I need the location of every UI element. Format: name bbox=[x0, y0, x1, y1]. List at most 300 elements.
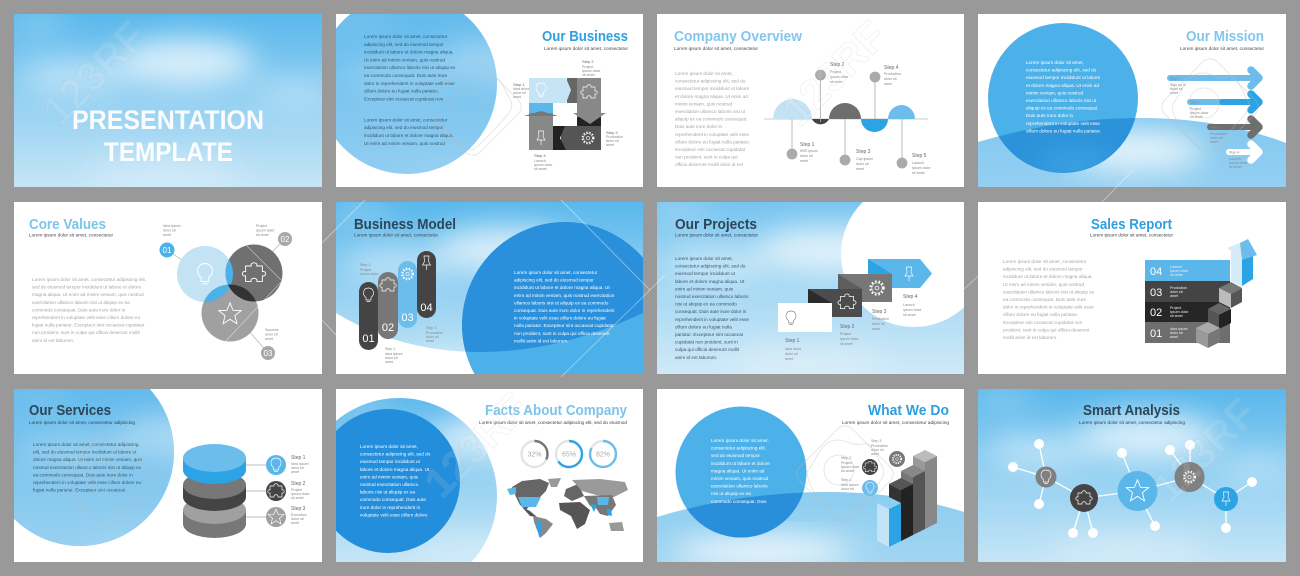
step labels: amet bbox=[785, 357, 793, 361]
pill labels: dolor sit bbox=[385, 356, 398, 360]
pill labels: dolor sit bbox=[426, 335, 439, 339]
numbered pills bbox=[359, 251, 436, 350]
step labels: amet bbox=[606, 143, 614, 147]
step labels bbox=[800, 62, 931, 175]
venn labels: dolor sit bbox=[265, 332, 278, 336]
numbered pills: 03 bbox=[401, 312, 414, 324]
subtitle: Lorem ipsum dolor sit amet, consectetur adipiscing bbox=[842, 420, 949, 425]
body text: pariatur. Excepteur sint occaecat bbox=[675, 332, 744, 337]
body text: Ut enim ad minim veniam, quis nostrud bbox=[1003, 282, 1084, 287]
body text: anim id est laborum. bbox=[32, 338, 74, 343]
step labels: Cap ipsum bbox=[856, 157, 873, 161]
title: Our Projects bbox=[675, 217, 757, 233]
step labels: sit amet bbox=[534, 167, 547, 171]
body text: Lorem ipsum dolor sit amet, consectetur bbox=[364, 117, 448, 122]
body text: sed do eiusmod tempor bbox=[711, 453, 760, 458]
venn labels: amet bbox=[265, 337, 273, 341]
body text: consectetur adipiscing elit, sed do bbox=[1026, 68, 1097, 73]
big blue circle bbox=[462, 222, 668, 428]
wave timeline bbox=[764, 99, 928, 132]
numbered bars: amet bbox=[1170, 335, 1178, 339]
network nodes bbox=[1036, 462, 1238, 512]
venn labels: Idea ipsum bbox=[163, 224, 181, 228]
step labels: Production bbox=[871, 444, 888, 448]
body text: reprehenderit in voluptate velit esse cillum dolore eu bbox=[33, 480, 142, 485]
arrow labels: amet bbox=[1210, 140, 1218, 144]
arrow labels: dolor sit bbox=[1210, 136, 1223, 140]
numbered bars: Launch bbox=[1170, 265, 1182, 269]
body text: Lorem ipsum dolor sit amet, bbox=[675, 71, 733, 76]
body text: magna aliqua. Ut enim ad minim veniam, quis nostrud bbox=[32, 292, 144, 297]
step labels: amet bbox=[291, 521, 299, 525]
slide: Facts About Company bbox=[336, 389, 643, 562]
slide: Sales Report bbox=[978, 202, 1286, 374]
pill labels: Step 2 bbox=[360, 263, 370, 267]
step labels: Idea dolor bbox=[785, 347, 802, 351]
step labels: Step 2 bbox=[841, 456, 851, 460]
body text: officia deserunt mollit anim id est bbox=[675, 162, 744, 167]
step labels: sit amet bbox=[291, 496, 304, 500]
step labels: Idea ipsum bbox=[841, 483, 859, 487]
pill labels bbox=[360, 263, 443, 364]
body text: non proident, sunt in culpa qui officia deserunt mollit bbox=[32, 330, 140, 335]
body text: exercitation ullamco laboris nisi ut aliquip ex bbox=[1003, 289, 1095, 294]
body text: consequat. Duis aute irure dolor in reprehenderit bbox=[514, 308, 615, 313]
title: Our Mission bbox=[1186, 29, 1264, 45]
venn labels: Success bbox=[265, 328, 279, 332]
slide: Business Model bbox=[336, 202, 643, 374]
body text: in voluptate velit esse cillum dolore eu fugiat bbox=[514, 316, 606, 321]
step labels: Launch bbox=[912, 161, 924, 165]
number badges: 01 bbox=[163, 246, 172, 255]
slide: Core Values bbox=[14, 202, 322, 374]
step labels: KBS ipsum bbox=[800, 149, 818, 153]
subtitle: Lorem ipsum dolor sit amet, consectetur bbox=[544, 46, 628, 51]
arrow 3 bbox=[1210, 119, 1259, 135]
numbered bars: 01 bbox=[1150, 328, 1162, 340]
slide: Our Business bbox=[336, 14, 643, 187]
body text: reprehenderit in voluptate velit esse cillum dolore eu bbox=[32, 315, 141, 320]
step labels: sit amet bbox=[912, 171, 925, 175]
pill labels: Production bbox=[426, 331, 443, 335]
step labels: ipsum dolor bbox=[841, 465, 860, 469]
body text: fugiat nulla pariatur. Excepteur sint occaecat bbox=[33, 488, 126, 493]
step labels: Step 1 bbox=[841, 478, 851, 482]
numbered bars: dolor sit bbox=[1170, 331, 1183, 335]
venn labels: sit amet bbox=[256, 233, 269, 237]
donut 82%: 82% bbox=[596, 452, 610, 458]
body text: nostrud exercitation ullamco laboris nisi ut aliquip ex bbox=[33, 465, 142, 470]
pill labels: Step 3 bbox=[426, 326, 436, 330]
body text: nostrud exercitation ullamco laboris bbox=[675, 294, 749, 299]
arrow labels: ipsum dolor bbox=[1229, 161, 1248, 165]
body text: ea commodo consequat. Duis aute irure dolor in bbox=[33, 472, 133, 477]
body text: ullamco laboris nisi ut aliquip ex ea commodo bbox=[514, 300, 609, 305]
step labels: amet bbox=[871, 452, 879, 456]
step labels: Project bbox=[841, 461, 852, 465]
arrow labels: amet bbox=[1170, 91, 1178, 95]
step labels: Step 2 bbox=[291, 481, 306, 487]
body text: exercitation ullamco laboris nisi ut aliquip ex ea bbox=[32, 300, 130, 305]
numbered pills: 02 bbox=[382, 322, 394, 334]
sky circle bbox=[14, 389, 174, 546]
body text: consectetur adipiscing elit, sed do bbox=[675, 79, 746, 84]
step labels: Project bbox=[291, 488, 302, 492]
cover title: PRESENTATION bbox=[72, 105, 264, 135]
arrow labels: Step 2 bbox=[1190, 100, 1200, 104]
numbered bars: Idea ipsum bbox=[1170, 327, 1188, 331]
numbered bars: Production bbox=[1170, 286, 1187, 290]
step labels: amet bbox=[513, 95, 521, 99]
pill labels: amet bbox=[426, 339, 434, 343]
donut 32% bbox=[522, 441, 548, 467]
numbered bars: ipsum dolor bbox=[1170, 310, 1189, 314]
step labels: amet bbox=[884, 82, 892, 86]
body text: Excepteur sint occaecat cupidatat non bbox=[364, 96, 444, 101]
step labels: Step 2 bbox=[840, 324, 855, 330]
pale overlay bbox=[657, 202, 964, 374]
step labels: Project bbox=[830, 70, 841, 74]
body text: reprehenderit in voluptate velit esse bbox=[675, 317, 749, 322]
body text: adipiscing elit, sed do eiusmod tempor bbox=[364, 42, 444, 47]
venn labels bbox=[163, 224, 279, 341]
subtitle: Lorem ipsum dolor sit amet, consectetur bbox=[354, 232, 438, 238]
title: Our Services bbox=[29, 403, 111, 419]
step labels: Step 2 bbox=[830, 62, 845, 68]
body text: dolor in reprehenderit in voluptate velit esse bbox=[364, 81, 455, 86]
subtitle: Lorem ipsum dolor sit amet, consectetur adipiscing bbox=[1079, 420, 1185, 425]
world map bbox=[507, 478, 628, 538]
step labels: dolor sit bbox=[800, 154, 813, 158]
sky background bbox=[973, 387, 1298, 563]
body text: exercitation ullamco laboris nisi ut bbox=[1026, 98, 1097, 103]
arrow labels bbox=[1170, 76, 1248, 169]
body text: enim ad minim veniam, quis bbox=[675, 286, 734, 291]
body text: mollit anim id est laborum. bbox=[514, 338, 568, 343]
body text: enim ad minim veniam, quis nostrud exercitation bbox=[514, 293, 615, 298]
step labels: Step 5 bbox=[912, 153, 927, 159]
body text: magna aliqua. Ut enim ad bbox=[711, 468, 765, 473]
body text: aliquip ex ea commodo consequat. bbox=[675, 117, 747, 122]
numbered bars: 03 bbox=[1150, 287, 1162, 299]
body text: exercitation ullamco laboris nisi ut aliquip ex bbox=[364, 65, 456, 70]
step labels: ipsum dolor bbox=[534, 163, 553, 167]
subtitle: Lorem ipsum dolor sit amet, consectetur adipiscing bbox=[29, 420, 135, 425]
step labels: amet bbox=[800, 159, 808, 163]
sky shape bbox=[336, 202, 643, 352]
slide: Our Projects bbox=[657, 202, 964, 374]
step labels: sit amet bbox=[841, 469, 854, 473]
step labels: amet bbox=[291, 470, 299, 474]
body text: Lorem ipsum dolor sit amet, consectetur bbox=[514, 270, 598, 275]
body text: labore et dolore magna aliqua. Ut bbox=[360, 467, 430, 472]
title: Sales Report bbox=[1091, 217, 1172, 233]
body text: eiusmod tempor incididunt ut labore bbox=[1026, 75, 1101, 80]
body text: non proident, sunt in culpa qui bbox=[675, 155, 738, 160]
step labels: Launch bbox=[534, 159, 546, 163]
arrow labels: Production bbox=[1210, 132, 1227, 136]
body text: enim ad minim veniam, quis bbox=[360, 474, 419, 479]
arrow labels: Project bbox=[1190, 107, 1201, 111]
body text: consectetur adipiscing elit, bbox=[711, 446, 766, 451]
sky circle bbox=[336, 14, 497, 174]
venn diagram bbox=[177, 244, 282, 342]
puzzle diagram bbox=[524, 78, 606, 150]
body text: minim veniam, quis nostrud bbox=[675, 101, 732, 106]
body text: Duis aute irure dolor in bbox=[1026, 113, 1074, 118]
body text: dolor in reprehenderit in voluptate velit esse bbox=[1003, 305, 1094, 310]
body text: elit, sed do eiusmod tempor incididunt ut labore et bbox=[33, 450, 137, 455]
body text: commodo consequat. Duis bbox=[711, 499, 767, 504]
watermark stamps: 123RF bbox=[1143, 389, 1266, 511]
body text: nisi ut aliquip ex ea commodo bbox=[675, 302, 737, 307]
body text: Lorem ipsum dolor sit amet, consectetur adipiscing bbox=[33, 442, 139, 447]
numbered bars: amet bbox=[1170, 294, 1178, 298]
slide: Our Mission bbox=[978, 14, 1286, 187]
body text: culpa qui officia deserunt mollit bbox=[675, 347, 740, 352]
body text: cillum dolore eu fugiat nulla pariatur. bbox=[1026, 128, 1101, 133]
numbered bars: 02 bbox=[1150, 307, 1162, 319]
arrow labels: Step 3 bbox=[1210, 126, 1220, 130]
watermark stamps: 123RF bbox=[33, 12, 156, 134]
step labels: dolor sit bbox=[872, 322, 885, 326]
body text: minim veniam, quis nostrud bbox=[1026, 90, 1083, 95]
step labels: Step 2 bbox=[582, 59, 594, 64]
step labels: Launch bbox=[903, 303, 915, 307]
sky circle bbox=[336, 398, 497, 562]
numbered pills: 01 bbox=[362, 333, 375, 345]
step labels: Step 3 bbox=[606, 130, 618, 135]
step labels: Execution bbox=[291, 513, 307, 517]
cover title bbox=[72, 105, 264, 167]
body text: cillum dolore eu fugiat nulla pariatur. bbox=[364, 89, 439, 94]
step labels: Idea dolor bbox=[513, 87, 530, 91]
pill labels: Project bbox=[360, 268, 371, 272]
numbered pills: 04 bbox=[420, 302, 433, 314]
body text: irure dolor in reprehenderit in bbox=[360, 505, 421, 510]
body text: aliquip ex ea commodo consequat. bbox=[1026, 106, 1098, 111]
arrow labels: dolor sit bbox=[1170, 87, 1183, 91]
step labels: ipsum dolor bbox=[903, 308, 922, 312]
body text: commodo consequat. Duis aute irure dolor in bbox=[32, 307, 126, 312]
step labels: sit amet bbox=[903, 313, 916, 317]
pill labels: ipsum dolor bbox=[360, 272, 379, 276]
subtitle: Lorem ipsum dolor sit amet, consectetur bbox=[1090, 232, 1173, 238]
body text: adipiscing elit, sed do eiusmod tempor bbox=[364, 125, 444, 130]
network dots bbox=[1008, 439, 1257, 538]
body text: labore et dolore magna aliqua. Ut bbox=[675, 279, 745, 284]
watermark stamps: 123RF bbox=[773, 12, 896, 134]
body text: et dolore magna aliqua. Ut enim ad bbox=[675, 94, 748, 99]
watermark stamps: 123RF bbox=[415, 384, 538, 506]
step labels bbox=[841, 439, 888, 491]
step labels: Step 3 bbox=[291, 506, 306, 512]
isometric bars bbox=[877, 450, 937, 547]
body text: nisi ut aliquip ex ea bbox=[711, 491, 751, 496]
body text: incididunt ut labore et dolore magna aliqua. bbox=[364, 50, 454, 55]
body text: consequat. Duis aute irure dolor in bbox=[675, 309, 747, 314]
donut 65% bbox=[556, 441, 582, 467]
title: Core Values bbox=[29, 217, 106, 233]
body text: consectetur adipiscing elit, sed do bbox=[675, 264, 746, 269]
circle overlap bbox=[998, 118, 1136, 173]
blue circle bbox=[676, 406, 806, 538]
body text: non proident, sunt in culpa qui officia deserunt bbox=[514, 331, 610, 336]
donut 65%: 65% bbox=[562, 452, 576, 458]
step labels bbox=[513, 59, 623, 171]
sky hill bbox=[657, 492, 964, 562]
sky hill bbox=[978, 118, 1286, 187]
numbered bars: sit amet bbox=[1170, 273, 1183, 277]
body text: cillum dolore eu fugiat nulla pariatur. bbox=[675, 139, 750, 144]
body text: Lorem ipsum dolor sit amet, consectetur bbox=[1003, 259, 1087, 264]
connector lines bbox=[240, 465, 266, 517]
step labels: Step 4 bbox=[534, 153, 546, 158]
title: Facts About Company bbox=[485, 403, 627, 419]
body text: consectetur adipiscing elit, sed do bbox=[360, 452, 431, 457]
pill labels: amet bbox=[385, 360, 393, 364]
step labels: Project bbox=[582, 65, 593, 69]
arrow up bbox=[1227, 239, 1257, 287]
step labels: Idea ipsum bbox=[291, 462, 309, 466]
disc stack bbox=[183, 444, 246, 538]
step labels: Step 4 bbox=[884, 65, 899, 71]
body text: laboris nisi ut aliquip ex ea bbox=[360, 490, 415, 495]
body text: reprehenderit in voluptate velit esse bbox=[675, 132, 749, 137]
step icons bbox=[862, 451, 905, 496]
step labels: dolor sit bbox=[606, 139, 619, 143]
body text: dolore magna aliqua. Ut enim ad minim veniam, quis bbox=[33, 457, 143, 462]
slide: Smart Analysis bbox=[978, 389, 1286, 562]
venn labels: Project bbox=[256, 224, 267, 228]
step labels: Step 3 bbox=[856, 149, 871, 155]
body text: mollit anim id est laborum. bbox=[1003, 335, 1057, 340]
body text: Lorem ipsum dolor sit amet, consectetur adipiscing elit, bbox=[32, 277, 146, 282]
step labels: dolor sit bbox=[841, 487, 854, 491]
timeline pins bbox=[787, 70, 907, 168]
step labels: sit amet bbox=[582, 73, 595, 77]
subtitle: Lorem ipsum dolor sit amet, consectetur bbox=[1180, 46, 1264, 51]
venn labels: ipsum dolor bbox=[256, 228, 275, 232]
body text: ea commodo consequat. Duis aute irure bbox=[1003, 297, 1087, 302]
arrow labels: sit amet bbox=[1190, 115, 1203, 119]
slide: Presentation Template cover bbox=[14, 14, 322, 187]
body text: exercitation ullamco laboris nisi ut bbox=[675, 109, 746, 114]
body text: commodo consequat. Duis aute bbox=[360, 497, 426, 502]
pill labels: Step 1 bbox=[385, 347, 395, 351]
body text: Ut enim ad minim veniam, quis nostrud bbox=[364, 57, 445, 62]
body text: anim id est laborum. bbox=[675, 355, 717, 360]
body text: Lorem ipsum dolor sit amet, bbox=[360, 444, 418, 449]
step labels: Production bbox=[872, 317, 889, 321]
body text: incididunt ut labore et dolore magna aliqua. bbox=[1003, 274, 1093, 279]
connector lines bbox=[167, 239, 285, 353]
body text: nulla pariatur. Excepteur sint occaecat cupidatat bbox=[514, 323, 614, 328]
number badges: 03 bbox=[264, 349, 273, 358]
step blocks bbox=[778, 259, 932, 332]
step icons bbox=[266, 455, 286, 527]
body text: reprehenderit in voluptate velit esse bbox=[1026, 121, 1100, 126]
cover title: TEMPLATE bbox=[104, 137, 233, 167]
dark circle bbox=[316, 409, 460, 553]
arrow labels: ipsum dolor bbox=[1190, 111, 1209, 115]
title: Smart Analysis bbox=[1083, 403, 1180, 419]
title: Company Overview bbox=[674, 29, 803, 45]
body text: eiusmod tempor incididunt ut bbox=[360, 459, 421, 464]
step labels: Production bbox=[884, 72, 901, 76]
step labels: ipsum dolor bbox=[840, 337, 859, 341]
body text: cillum dolore eu fugiat nulla bbox=[675, 324, 732, 329]
subtitle: Lorem ipsum dolor sit amet, consectetur adipiscing elit, sed do eiusmod bbox=[479, 420, 627, 425]
body text: Lorem ipsum dolor sit amet, consectetur bbox=[364, 34, 448, 39]
step labels: amet bbox=[856, 167, 864, 171]
body text: fugiat nulla pariatur. Excepteur sint occaecat cupidatat bbox=[32, 323, 145, 328]
body text: proident, sunt in culpa qui officia deserunt bbox=[1003, 327, 1090, 332]
pill labels: Idea ipsum bbox=[385, 352, 403, 356]
slide: What We Do bbox=[657, 389, 964, 562]
arrow 1 bbox=[1170, 70, 1259, 86]
step labels: sit amet bbox=[830, 80, 843, 84]
donut 82% bbox=[590, 441, 616, 467]
circle overlap bbox=[462, 222, 643, 352]
step labels: ipsum dolor bbox=[912, 166, 931, 170]
step labels: ipsum dolor bbox=[291, 492, 310, 496]
arrow labels: Step 1 bbox=[1170, 76, 1180, 80]
step labels: Step 1 bbox=[785, 338, 800, 344]
body text: Excepteur sint occaecat cupidatat bbox=[675, 147, 746, 152]
body text: cupidatat non proident, sunt in bbox=[675, 340, 738, 345]
body text: Lorem ipsum dolor sit amet, bbox=[1026, 60, 1084, 65]
sky background bbox=[652, 200, 977, 376]
body text: voluptate velit esse cillum dolore bbox=[360, 512, 428, 517]
numbered bars: Project bbox=[1170, 306, 1181, 310]
step labels bbox=[785, 294, 922, 361]
arrow 4 bbox=[1229, 144, 1259, 160]
step labels: dolor sit bbox=[291, 517, 304, 521]
step labels: dolor sit bbox=[513, 91, 526, 95]
title: What We Do bbox=[868, 403, 949, 419]
title: Our Business bbox=[542, 29, 628, 45]
arrow 2 bbox=[1190, 94, 1259, 110]
arrow labels: Launch bbox=[1229, 157, 1241, 161]
body text: eiusmod tempor incididunt ut bbox=[675, 271, 736, 276]
body text: exercitation ullamco laboris bbox=[711, 484, 768, 489]
arrow labels: Sign up is bbox=[1170, 83, 1186, 87]
body text: Lorem ipsum dolor sit amet, bbox=[675, 256, 733, 261]
venn labels: dolor sit bbox=[163, 228, 176, 232]
step labels: Step 3 bbox=[872, 309, 887, 315]
body text: incididunt ut labore et dolore magna aliqua. Ut bbox=[514, 285, 610, 290]
subtitle: Lorem ipsum dolor sit amet, consectetur bbox=[675, 232, 758, 238]
step labels: Project bbox=[840, 332, 851, 336]
body text: adipiscing elit, sed do eiusmod tempor bbox=[514, 278, 594, 283]
network links bbox=[1013, 444, 1252, 533]
step labels: Step 3 bbox=[871, 439, 881, 443]
arrow labels: sit amet bbox=[1229, 165, 1242, 169]
numbered bars: sit amet bbox=[1170, 314, 1183, 318]
donut 32%: 32% bbox=[527, 452, 542, 458]
body text: adipiscing elit, sed do eiusmod tempor bbox=[1003, 267, 1083, 272]
body text: cillum dolore eu fugiat nulla pariatur. bbox=[1003, 312, 1078, 317]
body text: Lorem ipsum dolor sit amet, bbox=[711, 438, 769, 443]
blue circle bbox=[988, 23, 1138, 173]
circle overlap bbox=[686, 492, 804, 538]
step labels: dolor sit bbox=[291, 466, 304, 470]
numbered bars bbox=[1145, 260, 1230, 343]
step labels: Step 1 bbox=[800, 142, 815, 148]
arrow labels: Step 4 bbox=[1229, 150, 1239, 154]
step labels: sit amet bbox=[840, 342, 853, 346]
